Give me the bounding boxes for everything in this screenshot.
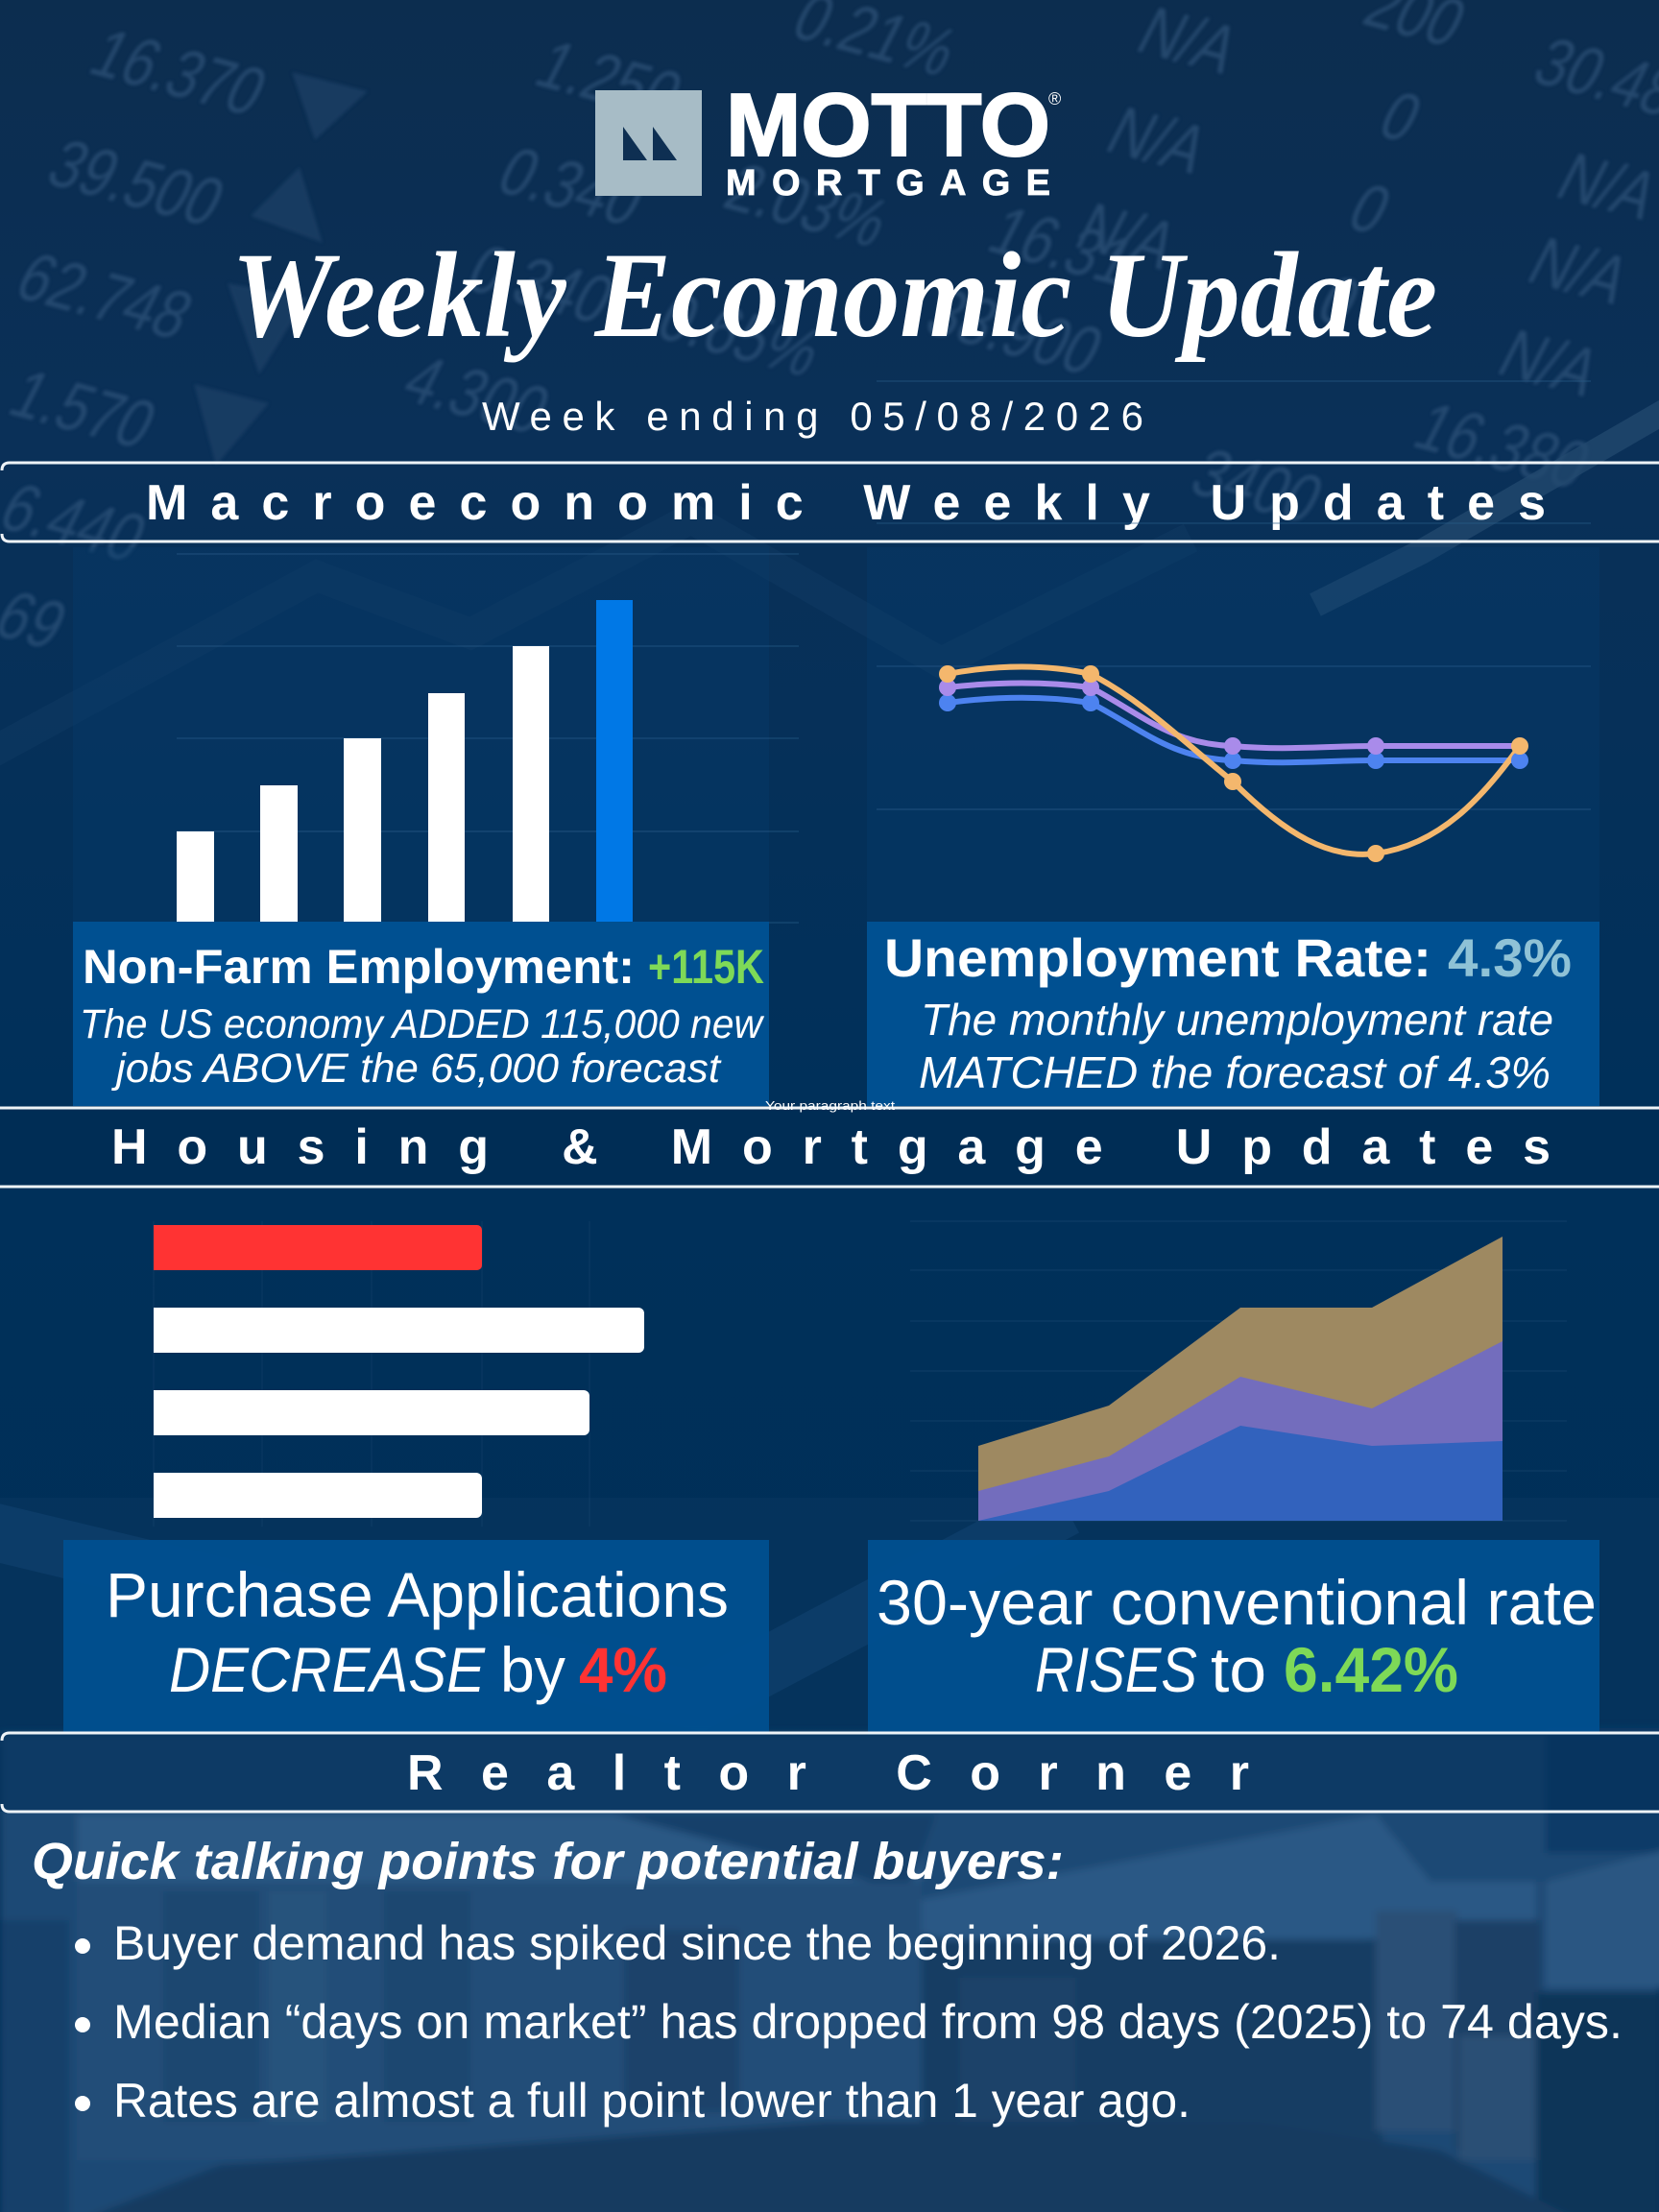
background: house photo	[0, 1728, 1659, 2212]
talking point: rates: Rates are almost a full point lower than 1 year ago.	[113, 2074, 1190, 2128]
line chart: unemployment	[939, 665, 1528, 862]
background: faint ticker numbers: 4.300	[391, 342, 562, 448]
background: chart arrow line	[0, 518, 1190, 758]
background: faint ticker numbers: N/A	[1486, 316, 1613, 411]
logo wordmark: ®	[1048, 89, 1061, 108]
background: faint ticker numbers: 38.900	[914, 275, 1115, 390]
background: faint ticker numbers: 16.380	[1402, 389, 1602, 504]
logo	[595, 75, 1061, 204]
caption: applications: DECREASE	[169, 1634, 486, 1705]
background: faint ticker numbers: 0	[1336, 170, 1403, 249]
background: faint ticker numbers: 3400	[1179, 435, 1334, 538]
background: faint ticker numbers: N/A	[1094, 93, 1221, 188]
background: faint ticker numbers: 0	[1367, 78, 1433, 156]
stray placeholder text: Your paragraph text	[765, 1098, 895, 1113]
background: faint ticker numbers	[0, 0, 1659, 664]
section header: macroeconomic	[2, 463, 1659, 541]
panel: 30-year conventional rate	[868, 1221, 1599, 1735]
caption: unemployment	[867, 922, 1599, 1106]
horizontal bar chart: applications	[154, 1221, 644, 1527]
panel: non-farm employment	[73, 547, 799, 1106]
caption: applications: 4%	[579, 1634, 667, 1705]
caption: unemployment: 4.3%	[1448, 927, 1572, 988]
caption: rates: 30-year conventional rate	[877, 1567, 1597, 1638]
logo wordmark: MOTTO	[726, 75, 1050, 175]
panel: purchase applications	[63, 1221, 769, 1733]
date line: Week ending 05/08/2026	[482, 394, 1143, 439]
background: faint ticker numbers: 16.31	[976, 193, 1147, 300]
background: faint ticker numbers: 0.340	[486, 133, 657, 240]
caption: rates: to	[1211, 1634, 1266, 1705]
talking point: days on market: Median “days on market” has dropped from 98 days (2025) to 74 days.	[113, 1995, 1623, 2049]
caption: applications	[63, 1540, 769, 1733]
section header: realtor corner	[0, 1733, 1659, 1812]
title: Weekly Economic Update	[231, 228, 1437, 363]
background: faint ticker numbers: 2.03%	[712, 150, 902, 261]
section header: housing and mortgage: Housing & Mortgage Updates	[111, 1119, 1551, 1175]
background: faint ticker numbers: 0.65%	[645, 279, 834, 391]
caption: rates	[868, 1540, 1599, 1735]
section header: macroeconomic: Macroeconomic Weekly Updates	[146, 475, 1546, 531]
caption: employment: The US economy ADDED 115,000 new	[80, 1001, 765, 1047]
caption: applications: by	[500, 1634, 565, 1705]
caption: employment	[73, 922, 769, 1106]
caption: unemployment: MATCHED the forecast of 4.3%	[919, 1047, 1551, 1097]
caption: rates: 6.42%	[1284, 1634, 1458, 1705]
section header: realtor corner: Realtor Corner	[407, 1745, 1249, 1801]
caption: employment: Non-Farm Employment:	[83, 940, 635, 994]
background: faint ticker numbers: 0.340	[455, 231, 626, 338]
bar chart: employment	[177, 600, 633, 923]
background: faint ticker numbers: 16.370	[78, 15, 278, 131]
logo wordmark: MORTGAGE	[726, 163, 1050, 204]
caption: employment: +115K	[648, 940, 764, 994]
caption: rates: RISES	[1035, 1634, 1197, 1705]
talking points heading: Quick talking points for potential buyers:	[32, 1833, 1064, 1890]
area chart: rates	[910, 1221, 1567, 1521]
caption: unemployment: The monthly unemployment rate	[921, 995, 1553, 1045]
background: faint ticker numbers: N/A	[1064, 189, 1190, 284]
background: faint ticker numbers: 39.500	[36, 126, 236, 241]
background: ticker arrows	[194, 72, 368, 466]
panel: realtor talking points	[32, 1833, 1623, 2128]
panel: unemployment rate	[867, 381, 1599, 1106]
background: faint ticker numbers: 0	[1306, 262, 1372, 341]
section header: housing and mortgage	[0, 1108, 1659, 1187]
background: faint ticker numbers: 1.570	[0, 356, 168, 463]
caption: unemployment: Unemployment Rate:	[884, 927, 1431, 988]
background: faint ticker numbers: N/A	[1516, 224, 1643, 319]
background: lower chart chevron	[0, 1498, 1659, 1747]
background: faint ticker numbers: 1.250	[523, 27, 694, 133]
caption: employment: jobs ABOVE the 65,000 forecast	[111, 1046, 722, 1092]
caption: applications: Purchase Applications	[106, 1559, 729, 1630]
talking point: buyer demand: Buyer demand has spiked since the beginning of 2026.	[113, 1916, 1281, 1970]
logo mark	[595, 90, 702, 196]
background: faint ticker numbers: 62.748	[4, 239, 204, 354]
